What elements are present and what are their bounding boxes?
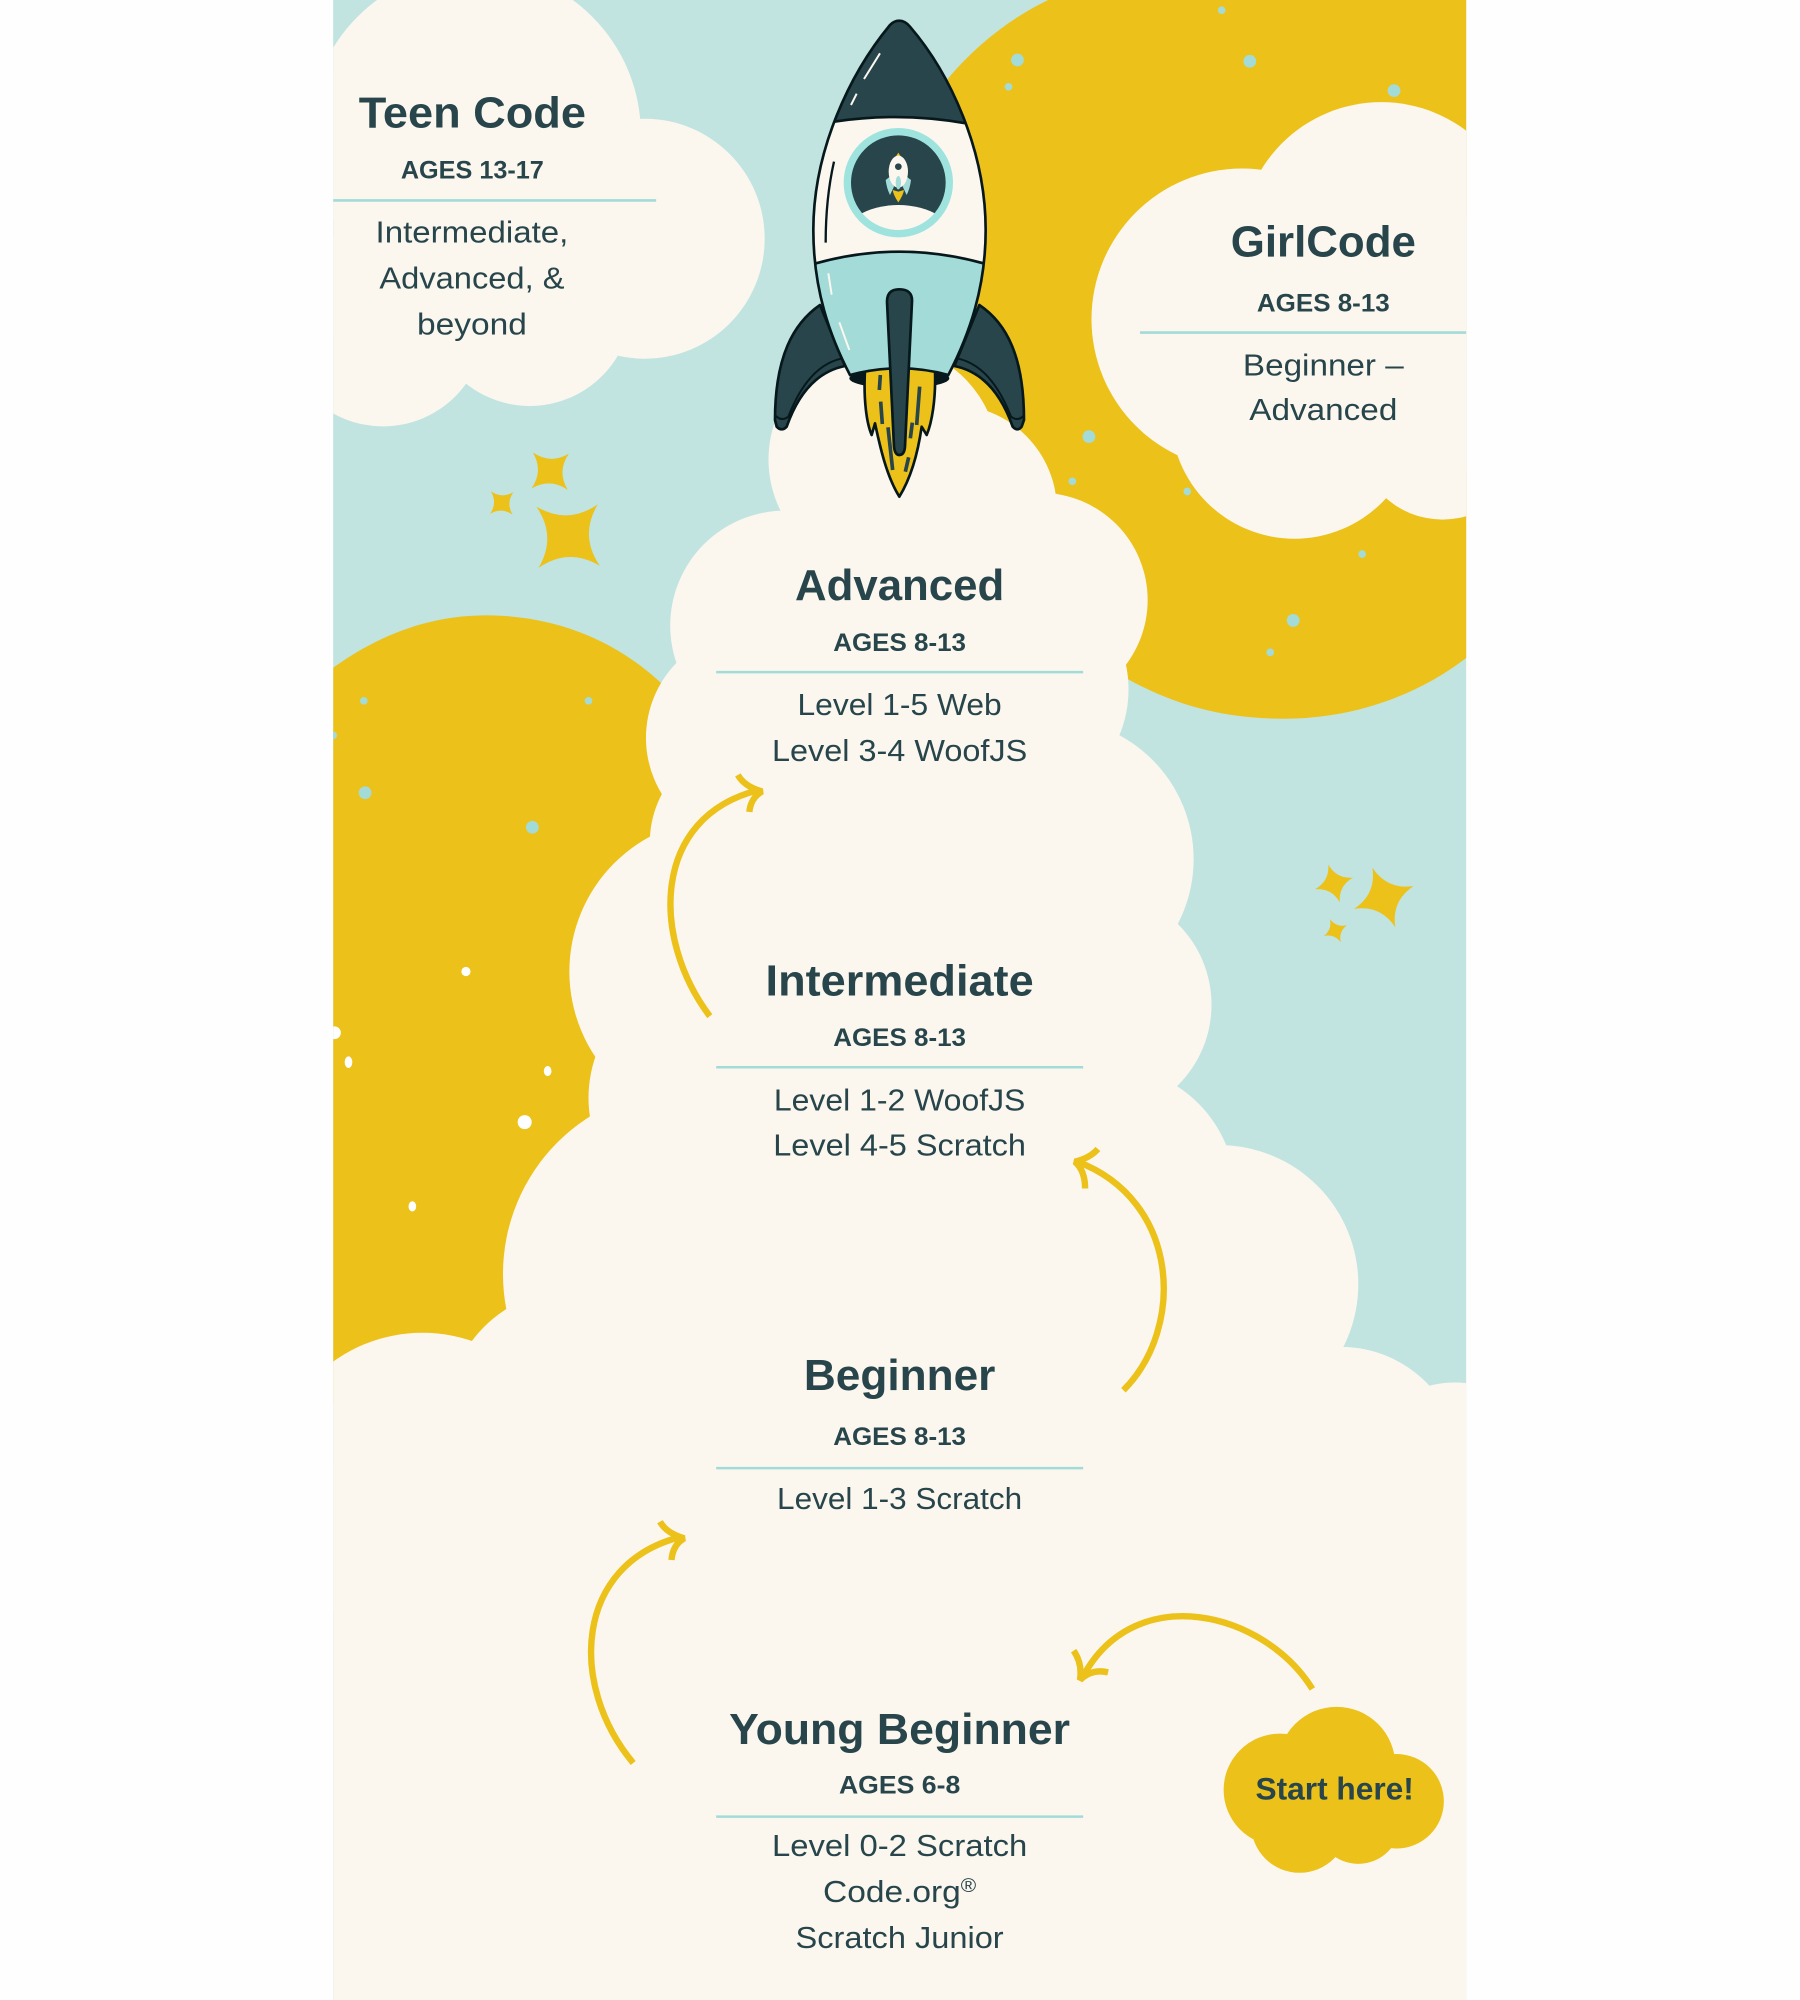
arrow: Start here to Young Beginner [1074, 1616, 1312, 1689]
yellow circle: top right [938, 0, 1467, 719]
text block: Beginner [716, 1352, 1083, 1516]
text block: Young Beginner: AGES 6-8 [839, 1772, 960, 1800]
text block: Intermediate: Level 4-5 Scratch [773, 1128, 1026, 1162]
arrow: Beginner to Intermediate [1075, 1149, 1164, 1390]
rocket fins [775, 305, 1024, 429]
central cloud stack [333, 368, 1466, 2000]
text block: Young Beginner: Scratch Junior [796, 1921, 1004, 1955]
text block: Beginner: AGES 8-13 [833, 1423, 966, 1451]
text block: Teen Code: AGES 13-17 [401, 157, 544, 185]
text block: Teen Code: Advanced, & [379, 262, 565, 296]
rocket flame [865, 367, 935, 497]
text block: Intermediate: AGES 8-13 [833, 1024, 966, 1052]
text block: Teen Code: beyond [417, 307, 527, 341]
text block: Teen Code [333, 90, 656, 341]
rocket center fin [887, 289, 912, 455]
text block: GirlCode: AGES 8-13 [1257, 289, 1390, 317]
text block: GirlCode: Advanced [1249, 393, 1397, 427]
rocket nozzle [849, 368, 949, 388]
cloud: Start here: Start here! [1256, 1770, 1414, 1806]
text block: Advanced [716, 562, 1083, 768]
rocket body [810, 17, 990, 383]
infographic [333, 0, 1466, 2000]
background clouds and stars [333, 0, 1466, 2000]
text block: GirlCode: Beginner – [1243, 348, 1405, 382]
arrow: Intermediate to Advanced [670, 775, 762, 1016]
text block: Advanced: Level 1-5 Web [797, 688, 1002, 722]
arrow: Young Beginner to Beginner [591, 1522, 684, 1763]
text block: Young Beginner [716, 1706, 1083, 1955]
text block: Advanced: Level 3-4 WoofJS [772, 734, 1027, 768]
text block: Teen Code: Teen Code [359, 90, 586, 138]
stars: right [1309, 856, 1425, 948]
cloud: GirlCode [1092, 102, 1466, 539]
text block: Intermediate: Level 1-2 WoofJS [774, 1084, 1025, 1118]
stars: left [479, 435, 629, 598]
yellow cloud: left [333, 615, 674, 1404]
text block: Intermediate [716, 958, 1083, 1162]
text block: Beginner: Beginner [804, 1352, 995, 1400]
text block: Young Beginner: Level 0-2 Scratch [772, 1829, 1027, 1863]
text block: Intermediate: Intermediate [766, 958, 1034, 1006]
dots: left [328, 697, 592, 1211]
cloud: Start here [1224, 1707, 1444, 1873]
text block: GirlCode [1140, 219, 1466, 427]
icon: rocket [775, 17, 1024, 497]
text block: GirlCode: GirlCode [1231, 219, 1416, 267]
text block: Young Beginner: Code.org [823, 1875, 949, 1909]
text block: Beginner: Level 1-3 Scratch [777, 1482, 1022, 1516]
rocket window [844, 128, 953, 238]
text block: Advanced: AGES 8-13 [833, 629, 966, 657]
background panel [333, 0, 1466, 2000]
text block: Advanced: Advanced [795, 562, 1004, 610]
text block: Teen Code: Intermediate, [376, 216, 568, 250]
cloud: Teen Code [333, 0, 765, 426]
dots: top right [1005, 6, 1400, 656]
text block: Young Beginner: ® [961, 1876, 976, 1897]
text block: Young Beginner: Young Beginner [729, 1706, 1070, 1754]
